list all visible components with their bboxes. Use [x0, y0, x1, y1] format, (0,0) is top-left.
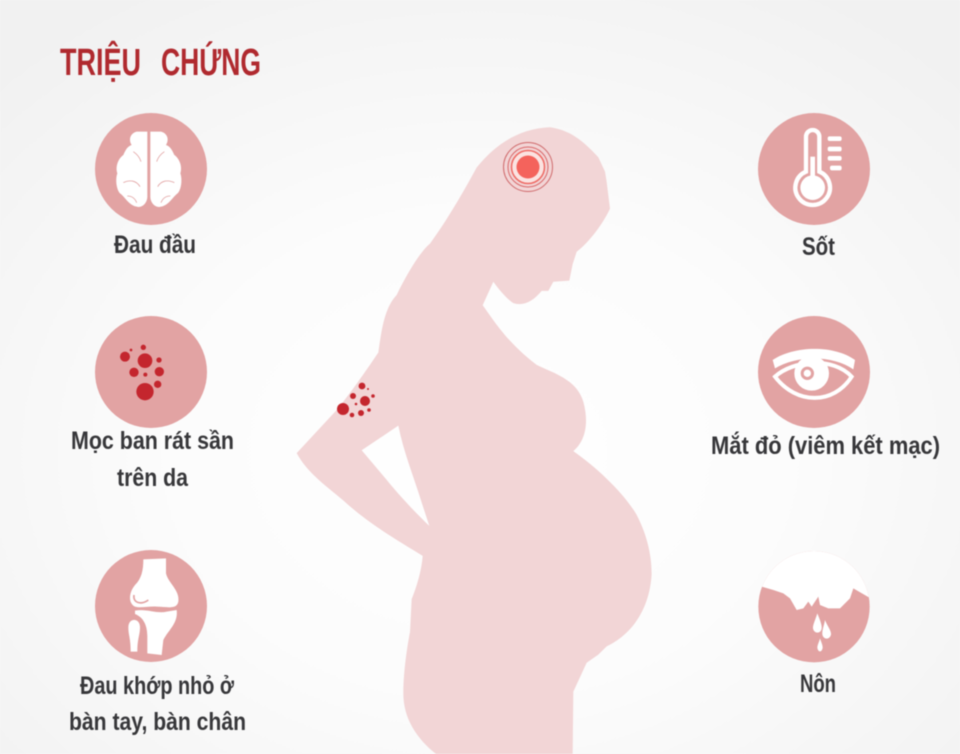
label: Mọc ban rát sần — [71, 427, 234, 455]
arm rash — [337, 383, 375, 417]
icon: brain — [95, 113, 207, 225]
label: trên da — [117, 464, 189, 492]
icon: vomit — [758, 586, 870, 663]
label: Nôn — [800, 670, 836, 698]
icon: knee joint — [95, 550, 207, 662]
icon: eye — [758, 316, 870, 428]
symptom: fever — [758, 113, 870, 261]
label — [71, 427, 234, 492]
label: bàn tay, bàn chân — [69, 708, 246, 736]
title: CHỨNG — [161, 40, 261, 84]
symptom: headache — [95, 113, 207, 259]
label — [69, 672, 246, 736]
head pain target — [504, 142, 552, 192]
symptom: red eyes — [711, 316, 940, 460]
symptom: rash — [71, 316, 234, 492]
label: Đau đầu — [114, 231, 196, 259]
icon: thermometer — [758, 113, 870, 225]
title: TRIỆU — [60, 40, 141, 84]
silhouette of pregnant woman — [297, 127, 652, 754]
symptom: joint pain — [69, 550, 246, 736]
label: Đau khớp nhỏ ở — [80, 672, 234, 700]
label: Sốt — [802, 233, 836, 261]
symptom: vomiting — [758, 586, 870, 693]
title — [60, 40, 261, 84]
icon: rash — [95, 316, 207, 428]
